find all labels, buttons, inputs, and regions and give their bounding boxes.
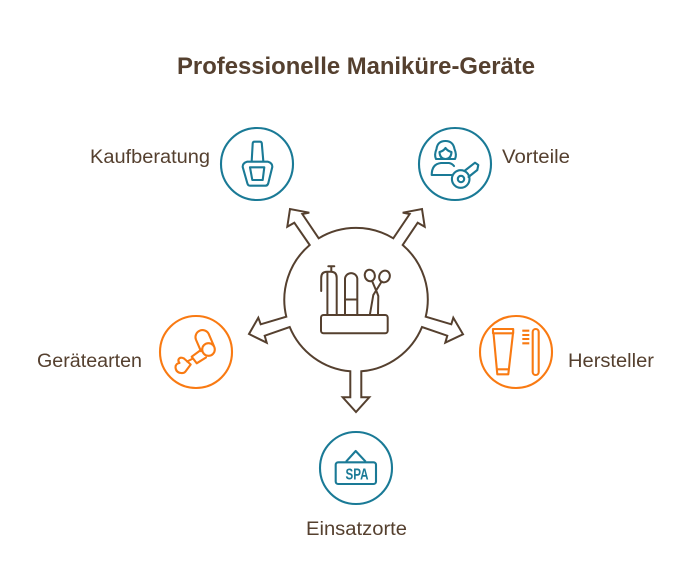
icon: manicure device [160, 316, 232, 388]
icon: manicure tools in holder [321, 266, 392, 333]
node: Gerätearten [37, 316, 232, 388]
label: Gerätearten: Gerätearten [37, 351, 142, 372]
central hub with five arrows [249, 209, 463, 412]
label: Einsatzorte: Einsatzorte [306, 519, 407, 540]
label: Kaufberatung: Kaufberatung [90, 147, 210, 168]
node: Kaufberatung [90, 128, 293, 200]
node: Hersteller [480, 316, 655, 388]
icon: nail polish bottle [221, 128, 293, 200]
icon: tube and nail file [480, 316, 552, 388]
node: Einsatzorte [306, 432, 407, 540]
icon: spa sign: SPA [346, 466, 369, 483]
label: Hersteller: Hersteller [568, 351, 655, 372]
icon: person with key [419, 128, 491, 200]
label: Vorteile: Vorteile [502, 147, 570, 168]
title: Professionelle Maniküre-Geräte [177, 53, 535, 80]
node: Vorteile [419, 128, 570, 200]
